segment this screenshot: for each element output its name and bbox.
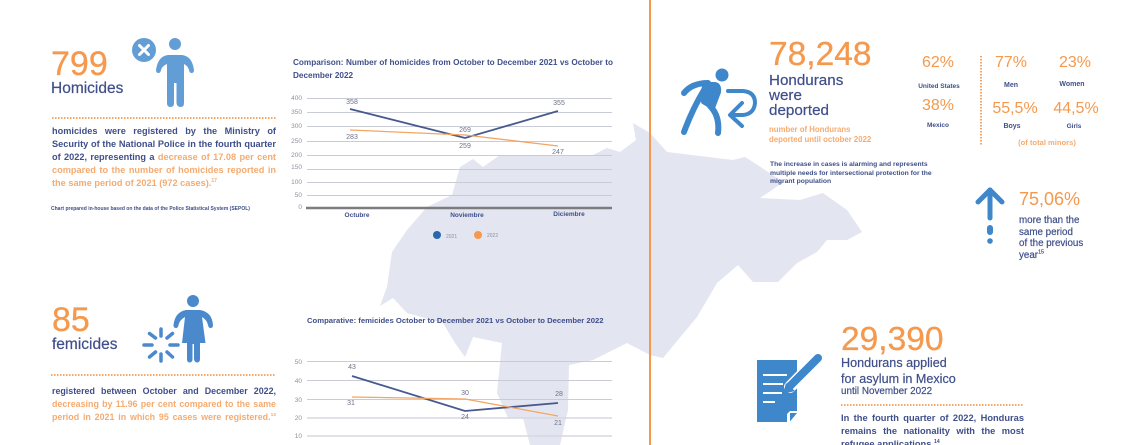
- line chart: homicides: 300: [291, 123, 302, 130]
- heading: 29,390 asylum applications: [841, 321, 956, 397]
- line chart: femicides: 21: [554, 420, 562, 427]
- heading: 85 femicides: 85: [52, 301, 90, 339]
- stats: gender and minors: 55,5%: [992, 100, 1038, 117]
- heading: 78,248 Hondurans were deported: 78,248: [769, 36, 871, 73]
- stats: gender and minors: Boys: [1003, 123, 1021, 130]
- line chart: homicides: 358: [346, 99, 358, 106]
- stat: 75,06%: [1018, 189, 1083, 261]
- heading: 29,390 asylum applications: Hondurans applied: [841, 356, 947, 370]
- line chart: homicides: 400: [291, 95, 302, 102]
- text: increase alert: multiple needs for intersectional protection for the: [770, 170, 932, 177]
- stats: destination countries: United States: [918, 83, 960, 90]
- heading: 78,248 Hondurans were deported: [768, 36, 871, 144]
- text: asylum description: remains the nationality with the most: [841, 426, 1024, 436]
- text: homicides description: of 2022, representing a decrease of 17.08 per cent: [52, 152, 276, 162]
- stat: 75,06%: year15: [1019, 250, 1044, 261]
- divider: dotted line: [52, 117, 276, 119]
- stats: gender and minors: [992, 54, 1099, 147]
- stat: 75,06%: more than the: [1019, 215, 1079, 226]
- text: femicides description: decreasing by 11.96 per cent compared to the same: [52, 399, 276, 409]
- stats: gender and minors: 77%: [995, 54, 1027, 71]
- stats: destination countries: 38%: [922, 97, 954, 114]
- text: homicides description: compared to the number of homicides reported in: [52, 165, 276, 175]
- text: increase alert: migrant population: [770, 178, 831, 185]
- line chart: femicides: 31: [347, 400, 355, 407]
- line chart: femicides: 43: [348, 364, 356, 371]
- heading: 78,248 Hondurans were deported: deported: [769, 102, 829, 119]
- text: asylum description: In the fourth quarter of 2022, Honduras: [841, 413, 1024, 423]
- line chart: femicides: 50: [295, 359, 302, 366]
- text: homicides description: the same period of 2021 (972 cases).17: [52, 178, 217, 188]
- line chart: homicides: 0: [298, 204, 302, 211]
- stats: gender and minors: (of total minors): [1018, 138, 1076, 147]
- divider: dotted line: [51, 374, 276, 376]
- heading: 78,248 Hondurans were deported: number of Hondurans: [769, 125, 850, 134]
- line chart: femicides: 40: [295, 378, 302, 385]
- text: homicides description: Security of the National Police in the fourth quarter: [52, 139, 276, 149]
- center divider line: [649, 0, 651, 445]
- stats: gender and minors: Women: [1059, 81, 1085, 88]
- chart title: homicides comparison: Comparison: Number of homicides from October to December 2021 vs October to: [293, 58, 613, 67]
- line chart: homicides: 50: [295, 192, 302, 199]
- heading: 799 homicides: 799: [51, 45, 108, 83]
- line chart: femicides: 20: [295, 415, 302, 422]
- line chart: homicides: 283: [346, 134, 358, 141]
- stat: 75,06%: same period: [1019, 227, 1073, 238]
- chart title: femicides comparison: Comparative: femicides October to December 2021 vs October to December 2022: [307, 316, 604, 325]
- line chart: homicides: 247: [552, 149, 564, 156]
- stats: destination countries: Mexico: [927, 122, 949, 129]
- heading: 799 homicides: Homicides: [51, 80, 123, 97]
- line chart: homicides: 269: [459, 127, 471, 134]
- line chart: femicides: 30: [295, 397, 302, 404]
- text: asylum description: [841, 413, 1024, 445]
- text: femicides description: [52, 386, 276, 422]
- chart legend: 2022: [487, 233, 498, 239]
- text: femicides description: registered between October and December 2022,: [52, 386, 276, 396]
- line chart: homicides: Octubre: [345, 212, 370, 219]
- stats: destination countries: [918, 54, 960, 129]
- line chart: homicides: 100: [291, 179, 302, 186]
- heading: 799 homicides: [51, 45, 123, 97]
- line chart: femicides: 10: [295, 433, 302, 440]
- line chart: homicides: 350: [291, 109, 302, 116]
- line chart: femicides: 28: [555, 391, 563, 398]
- line chart: homicides: 355: [553, 100, 565, 107]
- heading: 78,248 Hondurans were deported: were: [769, 87, 802, 104]
- heading: 29,390 asylum applications: for asylum in Mexico: [841, 372, 956, 386]
- line chart: homicides: Diciembre: [553, 211, 585, 218]
- divider: vertical dotted: [980, 56, 982, 146]
- heading: 29,390 asylum applications: 29,390: [841, 321, 943, 358]
- chart legend: 2021: [446, 234, 457, 240]
- source note: Chart prepared in-house based on the data of the Police Statistical System (SEPOL): [51, 206, 250, 212]
- text: homicides description: homicides were registered by the Ministry of: [52, 126, 276, 136]
- stat: 75,06%: of the previous: [1019, 238, 1083, 249]
- text: increase alert: The increase in cases is alarming and represents: [770, 161, 928, 168]
- stats: gender and minors: Girls: [1067, 123, 1081, 130]
- heading: 85 femicides: femicides: [52, 336, 117, 353]
- line chart: femicides: 30: [461, 390, 469, 397]
- divider: dotted line: [841, 404, 1024, 406]
- line chart: homicides: 259: [459, 143, 471, 150]
- stats: gender and minors: Men: [1004, 82, 1018, 89]
- line chart: homicides: Noviembre: [450, 212, 484, 219]
- line chart: femicides: 24: [461, 414, 469, 421]
- heading: 85 femicides: [52, 301, 117, 353]
- line chart: homicides: 200: [291, 152, 302, 159]
- text: homicides description: [52, 126, 276, 188]
- stats: gender and minors: 44,5%: [1053, 100, 1099, 117]
- heading: 78,248 Hondurans were deported: deported until october 2022: [769, 135, 871, 144]
- stats: destination countries: 62%: [922, 54, 954, 71]
- text: femicides description: period in 2021 in which 95 cases were registered.13: [52, 412, 276, 422]
- chart title: homicides comparison: December 2022: [293, 71, 353, 80]
- text: increase alert: [770, 161, 932, 185]
- stats: gender and minors: 23%: [1059, 54, 1091, 71]
- line chart: homicides: 150: [291, 164, 302, 171]
- chart title: homicides comparison: [293, 58, 613, 80]
- line chart: homicides: 250: [291, 138, 302, 145]
- heading: 29,390 asylum applications: until November 2022: [841, 386, 932, 397]
- heading: 78,248 Hondurans were deported: Hondurans: [769, 72, 843, 89]
- stat: 75,06%: 75,06%: [1019, 189, 1080, 209]
